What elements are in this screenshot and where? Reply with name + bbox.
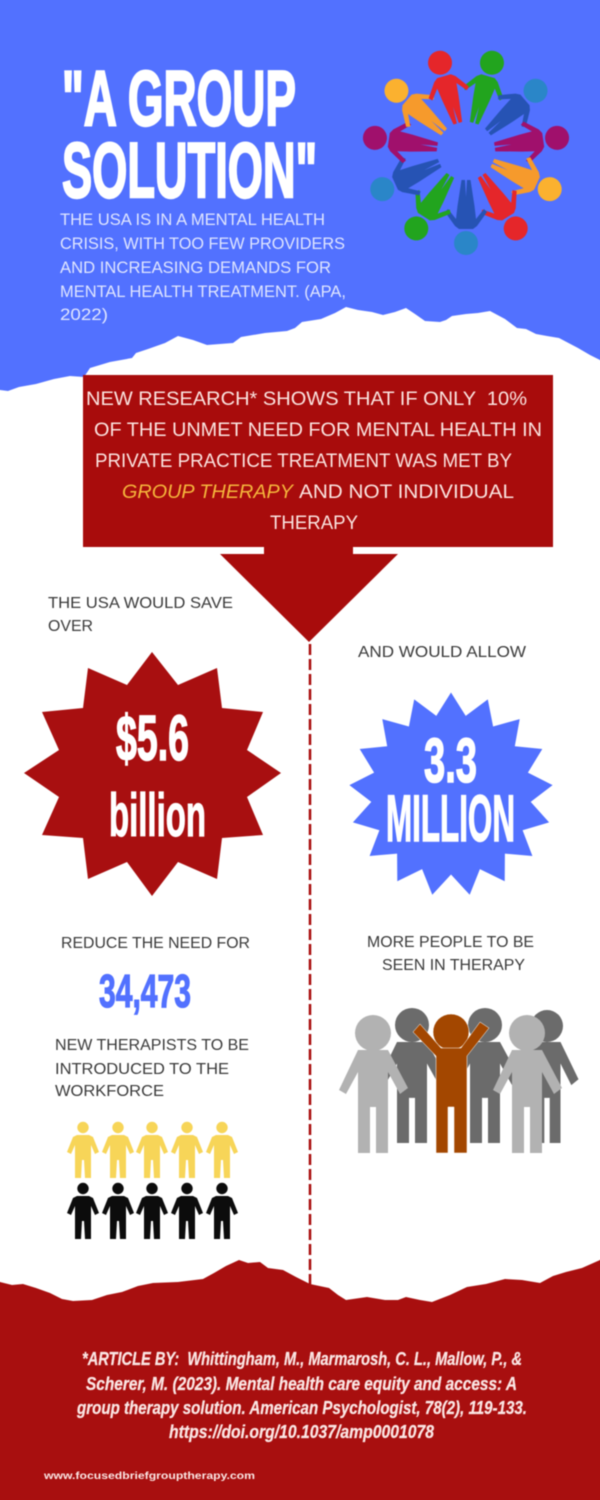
text: the USA would save over: OVER	[48, 618, 93, 635]
icon: yellow row of people	[67, 1122, 238, 1178]
text: the USA would save over	[48, 595, 233, 635]
panel: red research callout: OF THE UNMET NEED FOR MENTAL HEALTH IN	[94, 420, 542, 441]
panel: red research callout: THERAPY	[270, 513, 358, 534]
badge: 3.3 million: 3.3	[424, 727, 477, 796]
icon: group of people with raised arms	[339, 1008, 578, 1153]
text: new therapists: INTRODUCED TO THE	[55, 1061, 229, 1078]
intro text block: CRISIS, WITH TOO FEW PROVIDERS	[60, 234, 345, 253]
text: and would allow: AND WOULD ALLOW	[358, 644, 527, 661]
intro text block: THE USA IS IN A MENTAL HEALTH	[60, 210, 325, 229]
badge: $5.6 billion: $5.6	[116, 702, 189, 774]
panel: red footer background	[0, 1256, 600, 1500]
badge: $5.6 billion	[24, 652, 281, 896]
citation text block	[76, 1349, 527, 1442]
arrow: red downward arrow with stem	[220, 547, 398, 642]
dashed centre divider	[309, 644, 311, 1285]
badge: $5.6 billion: billion	[109, 782, 206, 849]
text: new therapists: NEW THERAPISTS TO BE	[55, 1037, 249, 1054]
text: new therapists: WORKFORCE	[55, 1083, 164, 1100]
panel: red research callout: AND NOT INDIVIDUAL	[299, 482, 514, 503]
text: more people to be seen: SEEN IN THERAPY	[382, 957, 525, 974]
intro text block	[60, 210, 346, 324]
website URL: www.focusedbriefgrouptherapy.com	[43, 1471, 255, 1482]
title: SOLUTION"	[62, 126, 317, 214]
intro text block: AND INCREASING DEMANDS FOR	[60, 258, 331, 277]
icon: circle of people holding hands	[360, 45, 572, 255]
intro text block: 2022)	[60, 305, 108, 324]
text: new therapists	[55, 1037, 249, 1100]
text: the USA would save over: THE USA WOULD SAVE	[48, 595, 233, 612]
title: "A GROUP	[62, 54, 296, 142]
citation text block: group therapy solution. American Psychologist, 78(2), 119-133.	[76, 1398, 527, 1418]
citation text block: https://doi.org/10.1037/amp0001078	[169, 1422, 434, 1442]
text: more people to be seen: MORE PEOPLE TO BE	[367, 934, 534, 951]
panel: red research callout: GROUP THERAPY	[122, 482, 294, 503]
text: more people to be seen	[367, 934, 534, 974]
badge: 3.3 million	[349, 692, 553, 895]
panel: red research callout	[83, 375, 553, 547]
icon: black row of people	[67, 1183, 238, 1239]
text: reduce the need for: REDUCE THE NEED FOR	[61, 935, 250, 952]
panel: blue header background	[0, 0, 600, 391]
title	[62, 54, 317, 214]
statistic: 34,473: 34,473	[99, 965, 191, 1017]
citation text block: Scherer, M. (2023). Mental health care equity and access: A	[86, 1374, 517, 1394]
panel: red research callout: NEW RESEARCH* SHOWS THAT IF ONLY 10%	[86, 389, 527, 410]
intro text block: MENTAL HEALTH TREATMENT. (APA,	[60, 282, 346, 301]
panel: red research callout: PRIVATE PRACTICE TREATMENT WAS MET BY	[95, 451, 512, 472]
